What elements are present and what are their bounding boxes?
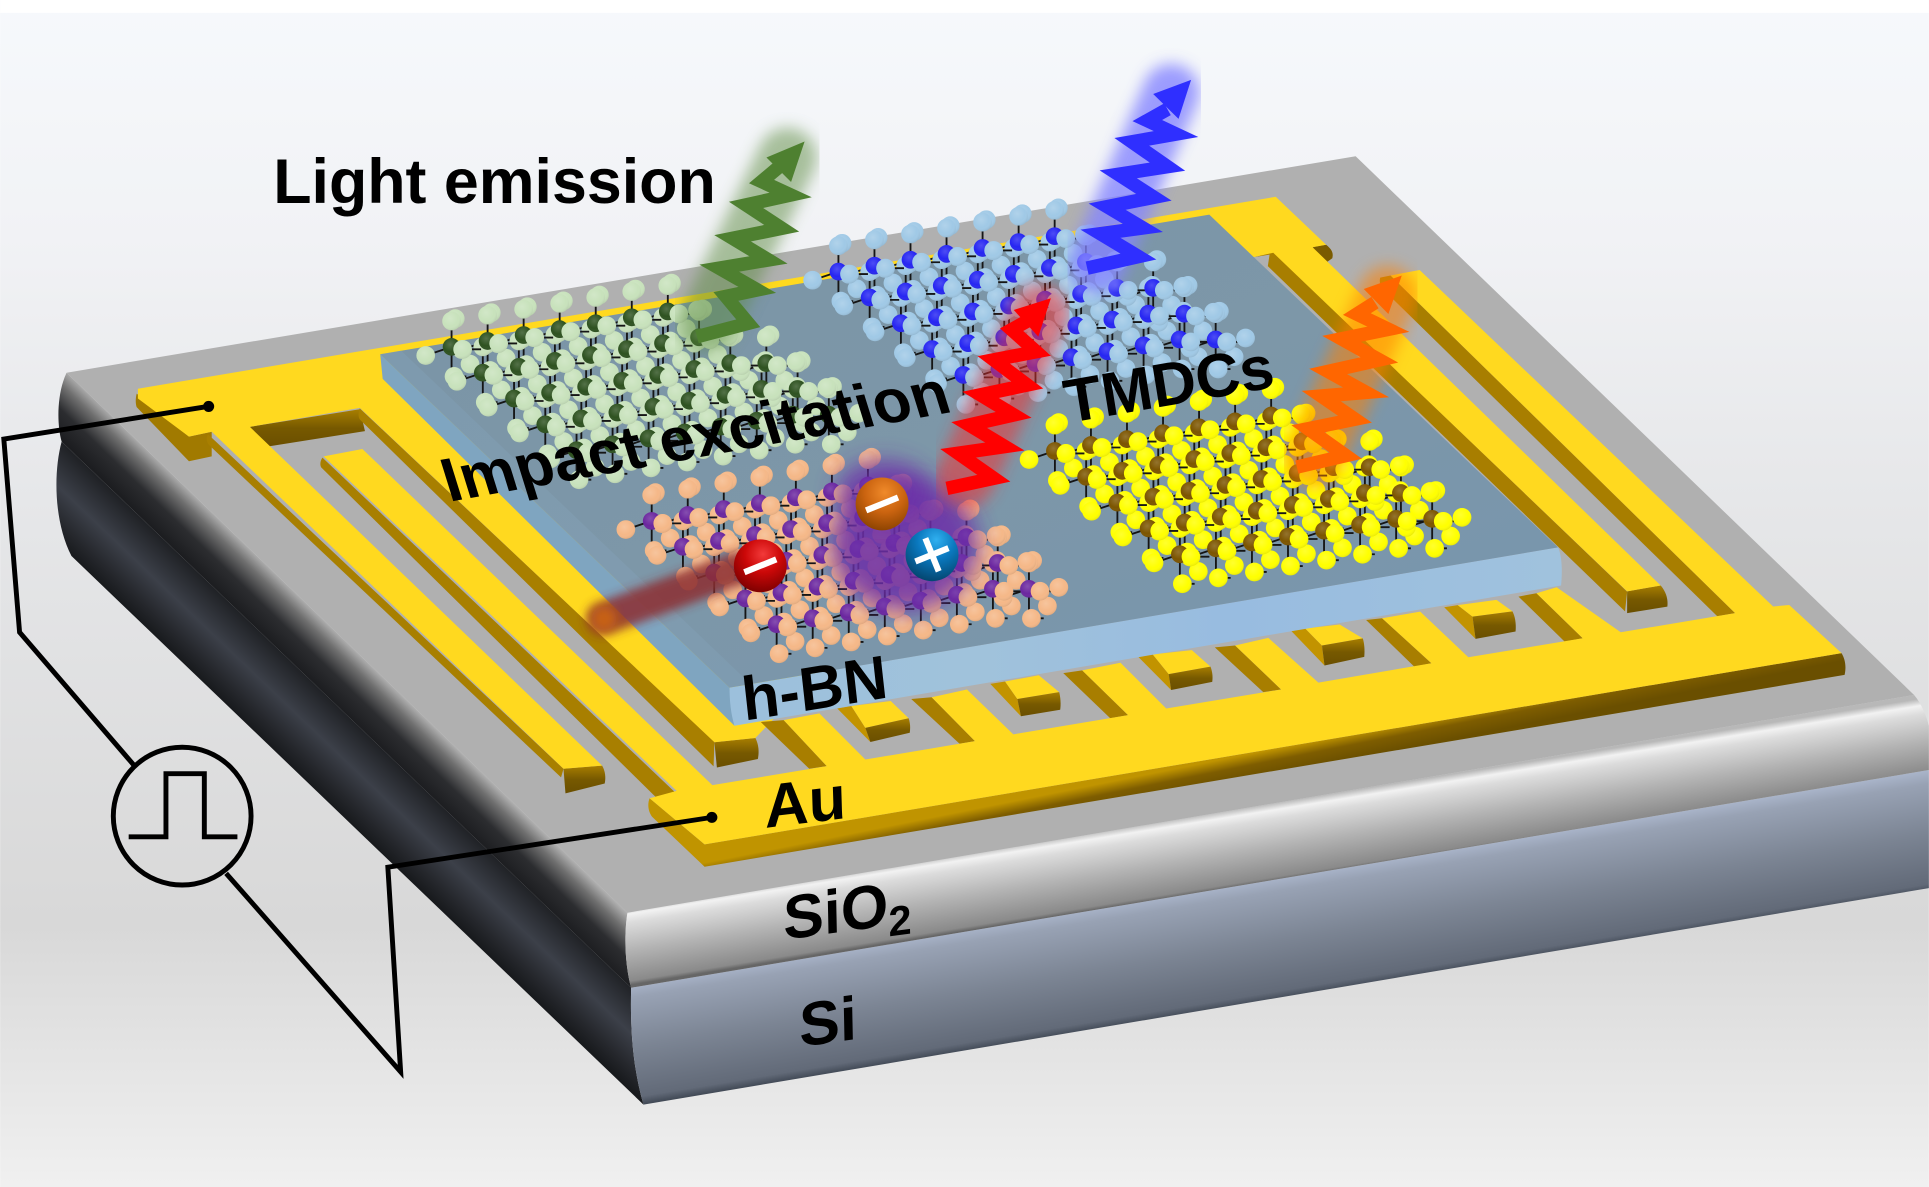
label: SiO2: 2	[888, 895, 912, 946]
label: Au: Au	[764, 763, 847, 842]
electron injection streak	[592, 568, 738, 631]
layer: SiO2	[58, 156, 1929, 988]
carrier: hole blue	[906, 528, 958, 581]
circuit wire with pulse source	[4, 401, 717, 1072]
electrode: front comb with Au pad	[320, 270, 1845, 867]
layer: h-BN flake	[380, 215, 1562, 726]
label: Light emission: Light emission	[273, 147, 716, 217]
arrow: blue emission	[1087, 80, 1191, 268]
layer: Si substrate	[56, 442, 1929, 1105]
lattice: blue TMDC	[803, 199, 1255, 414]
label: h-BN: h-BN	[738, 643, 891, 735]
label: TMDCs: TMDCs	[1059, 332, 1279, 437]
electrode: floating tabs	[837, 600, 1516, 742]
lattice: yellow and brown TMDC	[1020, 378, 1471, 593]
label: Si: Si	[799, 984, 857, 1061]
lattice: purple and peach TMDC	[617, 448, 1068, 663]
carrier: electron red	[734, 539, 787, 592]
electrode: back comb (Au)	[136, 197, 1668, 793]
arrow: red emission	[947, 298, 1051, 488]
label: SiO2: SiO	[783, 870, 889, 954]
lattice: green TMDC	[416, 274, 868, 489]
arrow: green emission	[697, 141, 805, 337]
carrier: electron orange	[856, 478, 909, 530]
purple exciton glow	[830, 460, 978, 611]
arrow: orange emission	[1297, 276, 1402, 467]
label: Impact excitation: Impact excitation	[432, 358, 958, 515]
